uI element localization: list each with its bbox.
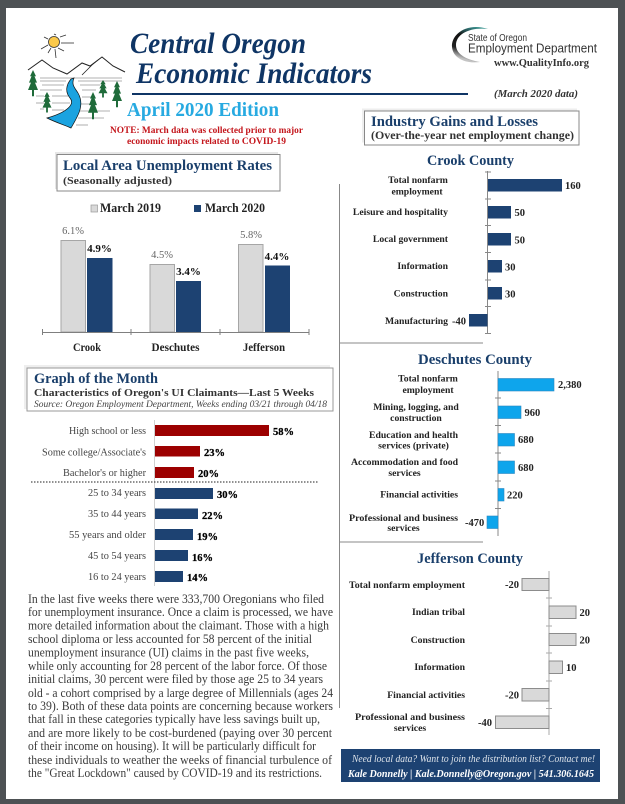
bar chart: Deschutes County <box>349 371 582 536</box>
chart: UI claimant characteristics: 14% <box>187 573 208 584</box>
bar chart: Jefferson County: 10 <box>566 663 576 674</box>
text block: claimant commentary: In the last five weeks there were 333,700 Oregonians who filed <box>28 592 325 606</box>
icon: Central Oregon landscape logo <box>28 34 125 128</box>
chart: UI claimant characteristics: Bachelor's or higher <box>63 468 147 479</box>
title: Economic Indicators <box>135 57 372 90</box>
note about COVID-19: economic impacts related to COVID-19 <box>127 137 286 147</box>
bar chart: Jefferson County: Professional and business <box>355 712 465 723</box>
bar chart: Crook County: Construction <box>394 288 449 300</box>
chart: unemployment rates: 4.4% <box>265 251 289 263</box>
note about COVID-19 <box>110 126 304 147</box>
bar chart: Jefferson County: Construction <box>411 635 466 646</box>
bar chart: Crook County: -40 <box>452 316 466 328</box>
bar chart: Deschutes County: 680 <box>518 435 534 446</box>
bar chart: Deschutes County: 960 <box>524 408 540 419</box>
panel: Deschutes County: Deschutes County <box>418 352 532 368</box>
chart: UI claimant characteristics: 16 to 24 years <box>88 572 146 583</box>
chart: unemployment rates: Deschutes <box>152 342 200 354</box>
chart: unemployment rates: 4.9% <box>87 243 112 255</box>
title: Central Oregon <box>130 27 306 60</box>
bar chart: Crook County: 30 <box>505 262 516 274</box>
panel: Jefferson County <box>349 551 590 735</box>
text block: claimant commentary <box>28 592 334 780</box>
bar chart: Crook County: Leisure and hospitality <box>353 207 448 218</box>
bar chart: Crook County: 50 <box>514 236 525 246</box>
bar chart: Jefferson County: -20 <box>505 690 519 702</box>
bar chart: Deschutes County: Total nonfarm <box>398 374 458 384</box>
note about COVID-19: NOTE: March data was collected prior to major <box>110 126 304 136</box>
bar chart: Deschutes County: 680 <box>518 463 534 474</box>
text block: claimant commentary: the "Great Lockdown" caused by COVID-19 and its restrictions. <box>28 766 322 780</box>
bar chart: Jefferson County: Indian tribal <box>412 607 465 618</box>
bar chart: Crook County: Total nonfarm <box>388 175 448 186</box>
bar chart: Crook County: employment <box>391 186 443 198</box>
bar chart: Crook County: 160 <box>565 181 581 192</box>
bar chart: Crook County: Manufacturing <box>385 316 448 327</box>
bar chart: Crook County <box>353 171 581 334</box>
chart: UI claimant characteristics: 55 years and older <box>69 530 147 541</box>
text block: claimant commentary: that fall in these categories typically have less savings built up, <box>28 712 320 726</box>
logo: Employment Department <box>452 27 597 69</box>
chart: UI claimant characteristics: 45 to 54 years <box>88 551 146 562</box>
panel: local area unemployment heading: Local Area Unemployment Rates <box>63 158 272 174</box>
callout: contact box: Need local data? Want to join the distribution list? Contact me! <box>351 754 595 765</box>
panel: local area unemployment heading: (Seasonally adjusted) <box>63 175 172 187</box>
text block: claimant commentary: of their income on housing). It will be particularly difficult for <box>28 739 317 753</box>
chart: unemployment rates: Jefferson <box>243 342 286 354</box>
panel: local area unemployment heading <box>55 152 280 191</box>
title <box>130 27 372 90</box>
bar chart: Deschutes County: construction <box>390 413 442 424</box>
chart: UI claimant characteristics: Some college/Associate's <box>42 448 146 458</box>
chart: unemployment rates: Crook <box>73 342 102 354</box>
text block: claimant commentary: while only accounting for 28 percent of the labor force. Of those <box>28 659 327 673</box>
legend: March 2020 <box>205 201 265 215</box>
text block: claimant commentary: and are more likely to be cost-burdened (paying over 30 percent <box>28 726 332 740</box>
bar chart: Deschutes County: 220 <box>507 490 523 502</box>
chart: UI claimant characteristics: 58% <box>273 427 294 438</box>
data date note: (March 2020 data) <box>494 89 578 100</box>
bar chart: Crook County: 50 <box>514 208 525 219</box>
bar chart: Deschutes County: Financial activities <box>380 490 458 500</box>
panel: industry gains and losses heading <box>362 108 579 145</box>
panel: Deschutes County <box>349 352 582 536</box>
panel: graph of the month heading <box>24 365 333 411</box>
bar chart: Jefferson County: services <box>394 723 426 734</box>
bar chart: Deschutes County: Education and health <box>369 430 459 441</box>
text block: claimant commentary: school diploma or less accounted for 58 percent of the initial <box>28 632 312 646</box>
chart: unemployment rates <box>42 201 309 354</box>
bar chart: Jefferson County: 20 <box>580 636 590 646</box>
text block: claimant commentary: these individuals to weather the weeks of financial turbulence of <box>28 753 333 767</box>
edition heading: April 2020 Edition <box>127 99 279 121</box>
text block: claimant commentary: old - a cohort comprised by a large degree of Millennials (ages 24 <box>28 686 334 700</box>
callout: contact box: Kale Donnelly | Kale.Donnelly@Oregon.gov | 541.306.1645 <box>347 769 594 780</box>
bar chart: Jefferson County: -20 <box>505 580 519 591</box>
panel: industry gains and losses heading: (Over-the-year net employment change) <box>371 130 574 142</box>
chart: UI claimant characteristics: 25 to 34 years <box>88 488 146 499</box>
text block: claimant commentary: more detailed information about the claimant. Those with a high <box>28 618 330 632</box>
bar chart: Deschutes County: Mining, logging, and <box>373 402 459 413</box>
bar chart: Deschutes County: Accommodation and food <box>351 457 459 468</box>
logo: Employment Department: Employment Department <box>468 40 597 56</box>
bar chart: Deschutes County: employment <box>402 385 454 396</box>
bar chart: Jefferson County: Information <box>414 662 466 673</box>
text block: claimant commentary: for unemployment insurance. Once a claim is processed, we have <box>28 605 333 619</box>
bar chart: Deschutes County: -470 <box>465 518 484 529</box>
chart: unemployment rates: 3.4% <box>176 266 201 278</box>
callout: contact box <box>341 749 600 782</box>
chart: unemployment rates: 5.8% <box>240 230 262 241</box>
bar chart: Deschutes County: services <box>387 523 420 534</box>
panel: Crook County: Crook County <box>427 153 514 169</box>
chart: UI claimant characteristics: High school or less <box>69 426 146 437</box>
panel: graph of the month heading: Graph of the Month <box>34 371 159 387</box>
bar chart: Crook County: Local government <box>373 234 449 245</box>
chart: UI claimant characteristics: 23% <box>204 448 225 459</box>
panel: Crook County <box>353 153 581 334</box>
bar chart: Jefferson County: Financial activities <box>387 690 465 701</box>
chart: unemployment rates: 4.5% <box>151 250 173 261</box>
bar chart: Deschutes County: services <box>388 468 421 479</box>
text block: claimant commentary: unemployment insurance (UI) claims in the past five weeks, <box>28 646 309 660</box>
bar chart: Crook County: Information <box>397 261 449 272</box>
legend: March 2019 <box>100 201 161 215</box>
bar chart: Deschutes County: 2,380 <box>558 380 582 391</box>
panel: graph of the month heading: Source: Oregon Employment Department, Weeks ending 03/21 through 04/18 <box>34 400 327 410</box>
chart: UI claimant characteristics: 22% <box>202 511 223 522</box>
bar chart: Jefferson County: -40 <box>478 718 492 729</box>
chart: UI claimant characteristics: 20% <box>198 469 219 480</box>
chart: UI claimant characteristics <box>31 420 319 586</box>
panel: Jefferson County: Jefferson County <box>417 551 523 567</box>
text block: claimant commentary: to 39). Both of these data points are concerning because workers <box>28 699 333 713</box>
chart: UI claimant characteristics: 16% <box>192 553 213 564</box>
chart: unemployment rates: 6.1% <box>62 226 84 237</box>
panel: graph of the month heading: Characteristics of Oregon's UI Claimants—Last 5 Weeks <box>34 387 315 399</box>
bar chart: Deschutes County: Professional and business <box>349 513 458 524</box>
panel: industry gains and losses heading: Industry Gains and Losses <box>371 114 538 130</box>
chart: UI claimant characteristics: 35 to 44 years <box>88 509 146 520</box>
bar chart: Crook County: 30 <box>505 290 516 300</box>
text block: claimant commentary: initial claims, 30 percent were filed by those age 25 to 34 years <box>28 672 323 686</box>
logo: Employment Department: www.QualityInfo.org <box>494 58 590 69</box>
bar chart: Jefferson County <box>349 571 590 735</box>
chart: UI claimant characteristics: 30% <box>217 490 238 501</box>
legend <box>91 201 265 215</box>
bar chart: Deschutes County: services (private) <box>378 440 449 452</box>
logo: Employment Department: State of Oregon <box>468 33 527 44</box>
chart: UI claimant characteristics: 19% <box>197 532 218 543</box>
bar chart: Jefferson County: 20 <box>580 608 590 619</box>
bar chart: Jefferson County: Total nonfarm employment <box>349 580 466 591</box>
